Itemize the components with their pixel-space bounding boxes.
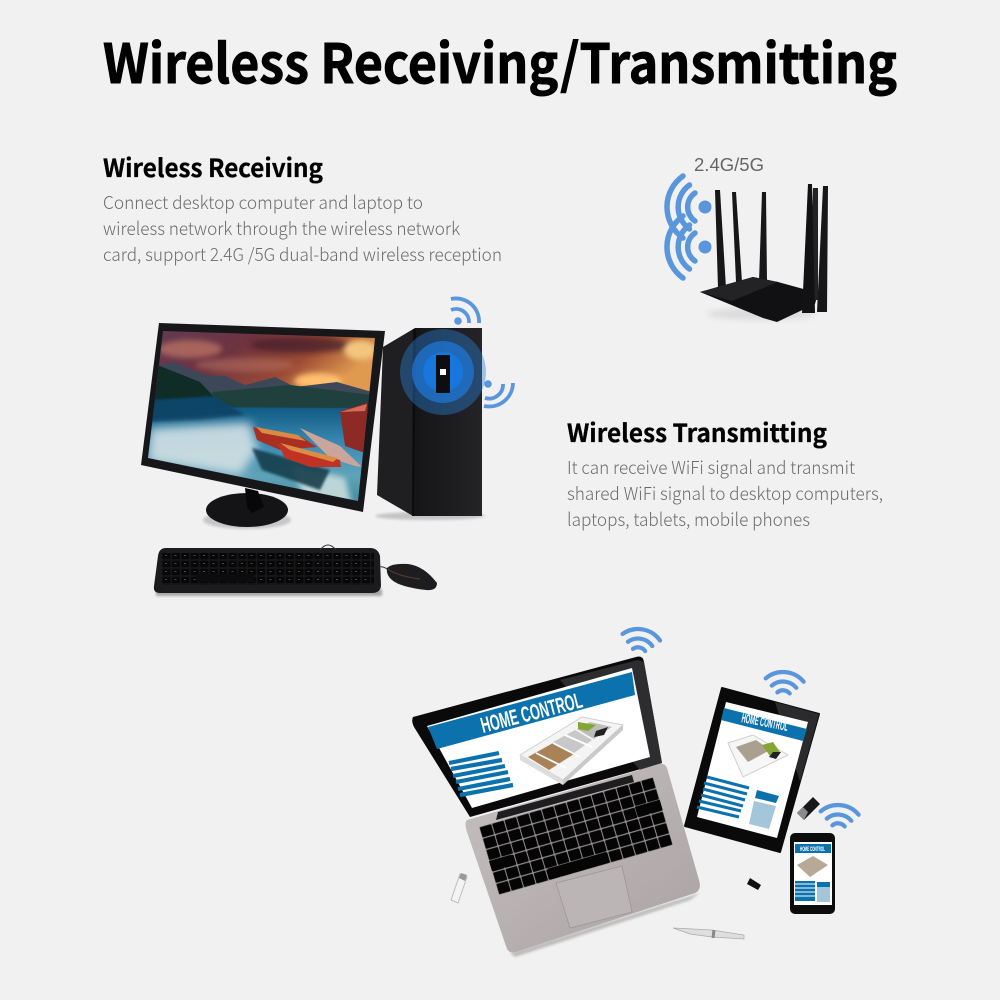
text block: wireless receiving description: Connect desktop computer and laptop to xyxy=(103,189,423,215)
monitor xyxy=(140,323,385,529)
desktop computer illustration xyxy=(140,298,513,596)
usb stick black xyxy=(797,797,820,820)
tablet menu bars xyxy=(697,777,749,817)
tablet screen: HOME CONTROL xyxy=(740,710,789,734)
tablet screen xyxy=(697,702,808,838)
laptop keyboard xyxy=(479,777,673,895)
usb nano adapter xyxy=(747,878,761,890)
icon: wifi above tablet xyxy=(765,670,804,695)
laptop screen xyxy=(427,668,650,808)
text block: wireless receiving description: card, support 2.4G /5G dual-band wireless reception xyxy=(103,241,502,267)
tablet floor plan xyxy=(728,735,788,777)
text block: wireless receiving description xyxy=(103,189,502,267)
usb stick white xyxy=(451,873,467,903)
screen menu bars xyxy=(449,753,513,795)
pen xyxy=(673,928,744,939)
keyboard xyxy=(154,545,382,596)
tablet side panel xyxy=(749,790,779,829)
router body and antennas xyxy=(700,184,828,322)
laptop xyxy=(412,657,700,957)
text block: wireless transmitting description: shared WiFi signal to desktop computers, xyxy=(567,480,883,506)
icon: wifi signal top xyxy=(451,298,479,325)
tablet xyxy=(685,688,819,852)
label: 2.4G/5G: 2.4G/5G xyxy=(694,155,764,175)
phone xyxy=(790,833,835,914)
screen title: HOME CONTROL xyxy=(478,688,585,738)
floor plan xyxy=(520,717,623,785)
trackpad xyxy=(556,866,632,928)
text block: wireless receiving description: wireless network through the wireless network xyxy=(103,215,461,241)
mouse xyxy=(379,564,437,590)
devices illustration xyxy=(412,626,859,957)
heading: wireless receiving: Wireless Receiving xyxy=(103,149,323,185)
title: Wireless Receiving/Transmitting xyxy=(103,20,897,99)
laptop base xyxy=(466,764,700,953)
text block: wireless transmitting description: It can receive WiFi signal and transmit xyxy=(567,454,856,480)
pc tower xyxy=(375,328,485,520)
wifi usb adapter highlight xyxy=(400,329,486,415)
icon: wifi above phone xyxy=(820,803,859,828)
router illustration xyxy=(667,155,828,322)
monitor screen landscape xyxy=(140,328,380,505)
icon: dual wifi signal xyxy=(667,176,712,278)
text block: wireless transmitting description xyxy=(567,454,883,532)
heading: wireless transmitting: Wireless Transmitting xyxy=(567,414,827,450)
text block: wireless transmitting description: laptops, tablets, mobile phones xyxy=(567,506,810,532)
icon: wifi above laptop xyxy=(620,626,661,653)
phone screen title: HOME CONTROL xyxy=(800,847,825,853)
icon: wifi signal right xyxy=(484,380,513,407)
